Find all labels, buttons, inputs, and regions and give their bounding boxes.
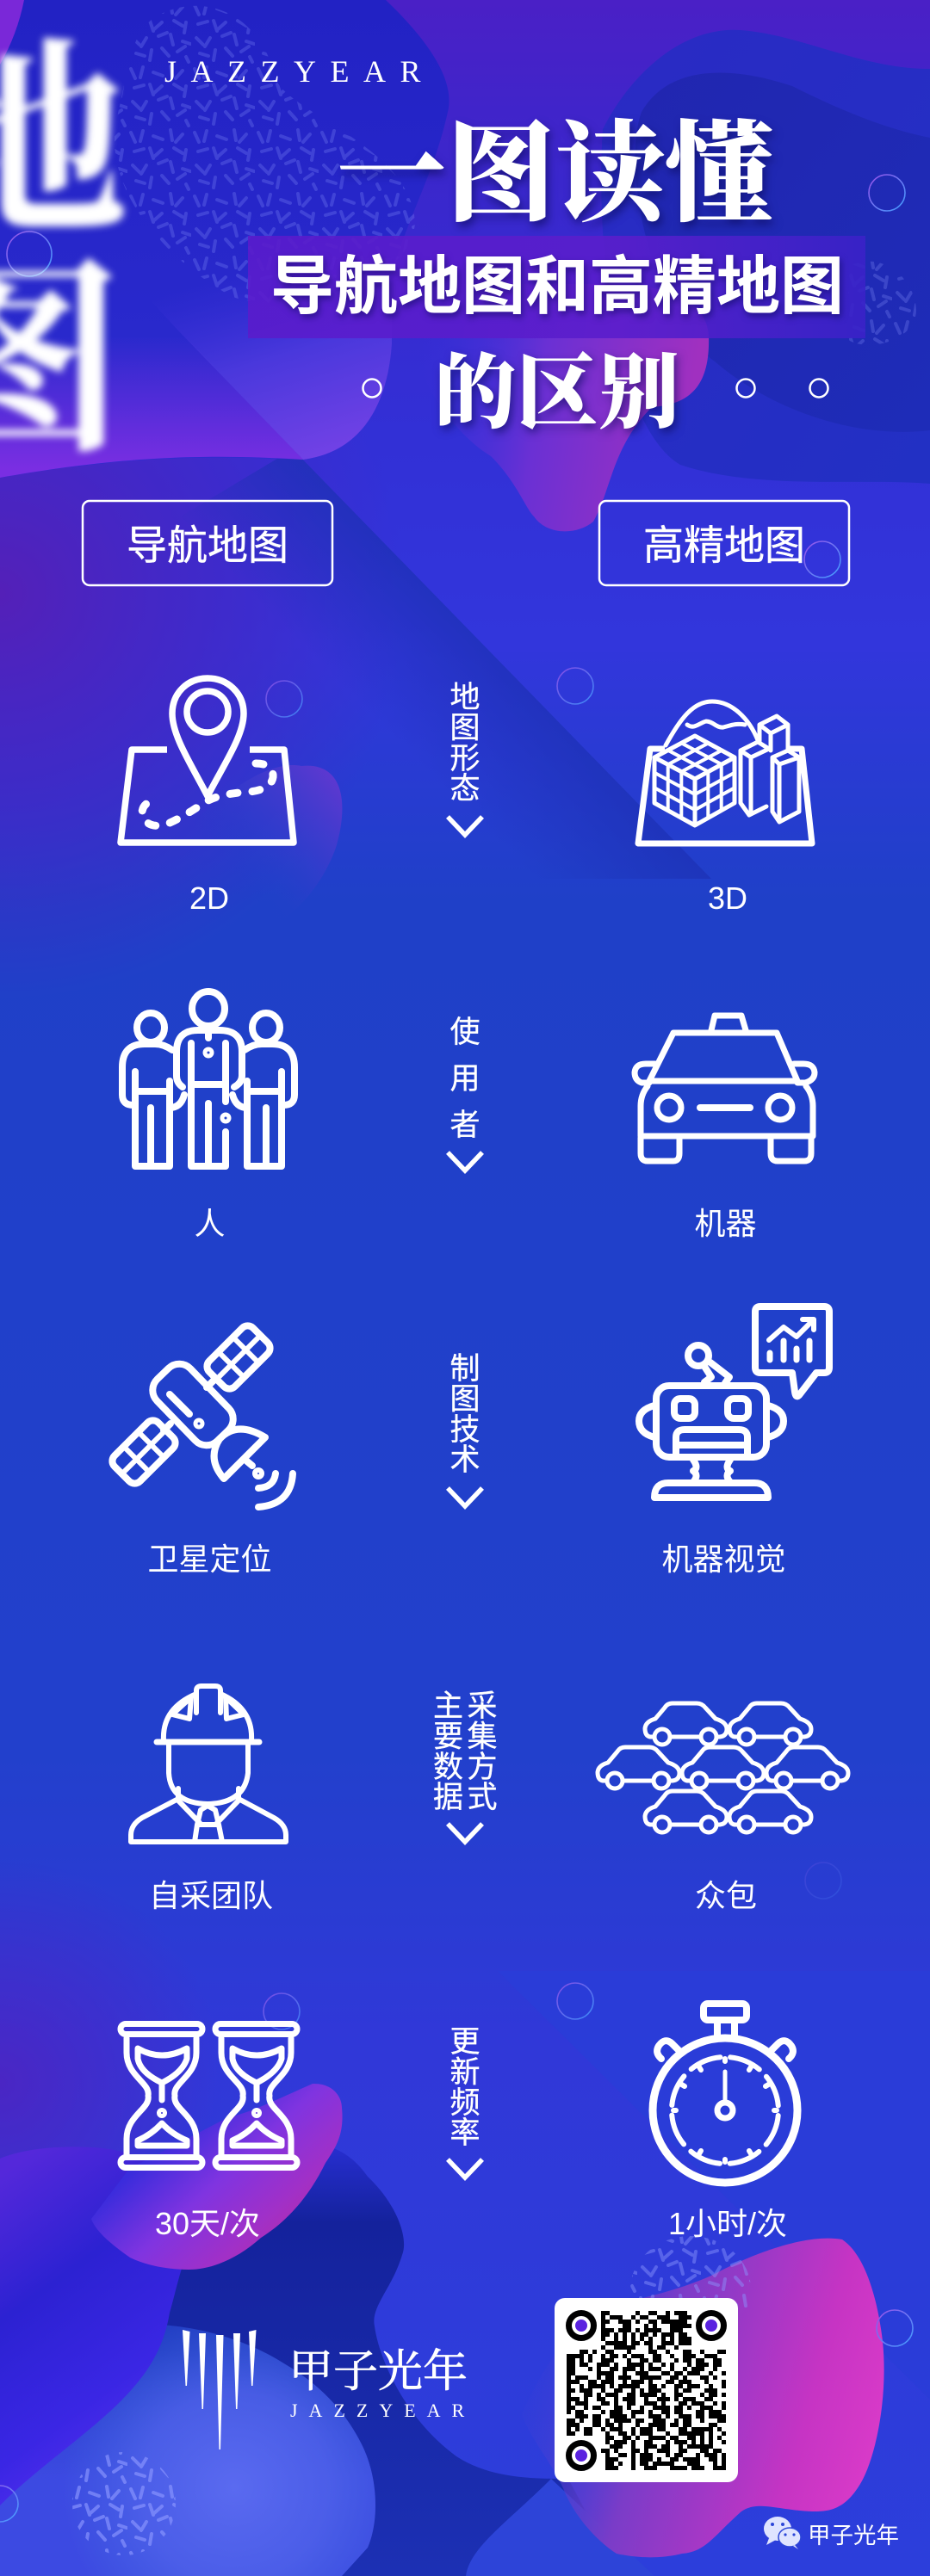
label: 机器视觉: 机器视觉 [661,1541,786,1577]
icon: people [122,991,294,1166]
vertical label: 制图技术: 图 [450,1382,480,1417]
title line 1: 一图读懂 [337,115,774,236]
arrow down 5 [448,2159,482,2178]
vertical label: 制图技术: 制 [450,1352,480,1386]
vertical label: 主要数据采集方式: 采 [467,1690,498,1723]
title highlight bar: 导航地图和高精地图 [270,250,844,322]
vertical label: 使用者: 者 [450,1109,480,1142]
vertical label: 主要数据采集方式 [433,1690,498,1814]
icon: 3D map [638,701,812,843]
button: 导航地图 [83,501,332,585]
icon: taxi [635,1016,815,1161]
vertical label: 主要数据采集方式: 数 [433,1751,463,1784]
label: 30天/次: 30天/次 [155,2206,260,2241]
vertical label: 使用者: 使 [450,1016,480,1049]
label: 自采团队: 自采团队 [149,1878,273,1913]
vertical label: 主要数据采集方式: 据 [433,1781,463,1814]
icon: map with pin [121,678,294,843]
vertical label: 地图形态: 态 [450,772,480,806]
vertical label: 主要数据采集方式: 方 [467,1751,498,1784]
button: 高精地图 [599,501,849,585]
icon: wechat [764,2517,801,2549]
arrow down 4 [448,1824,482,1842]
vertical label: 更新频率: 频 [450,2086,480,2120]
vertical label: 制图技术: 技 [450,1413,480,1447]
logo: 甲子光年 wordmark: JAZZYEAR [290,2400,475,2421]
arrow down 2 [448,1152,482,1171]
logo: brand mark spikes [183,2330,257,2449]
icon: two hourglasses [121,2024,297,2167]
vertical label: 更新频率: 新 [450,2055,480,2090]
label: 人: 人 [194,1206,226,1241]
icon: satellite [109,1323,293,1507]
small title dots [363,379,828,398]
icon: engineer with helmet [131,1686,286,1842]
label: 卫星定位: 卫星定位 [147,1541,272,1577]
arrow down 3 [448,1488,482,1506]
QR code [555,2298,738,2482]
label: 机器: 机器 [694,1206,757,1241]
vertical label: 更新频率: 率 [450,2116,480,2150]
button: 高精地图: 高精地图 [643,522,805,568]
vertical label: 地图形态: 图 [450,711,480,745]
title highlight bar [248,236,865,338]
icon: stopwatch [653,2004,797,2183]
vertical label: 更新频率: 更 [450,2025,480,2059]
title line 3: 的区别 [434,348,680,439]
vertical label: 地图形态: 形 [450,742,480,775]
label: 众包: 众包 [695,1878,757,1913]
vertical label: 制图技术: 术 [450,1443,480,1477]
brand wordmark top: JAZZYEAR [164,54,435,89]
vertical label: 使用者: 用 [450,1062,480,1096]
icon: many cars [598,1703,848,1832]
vertical label: 主要数据采集方式: 集 [467,1720,498,1754]
label: 3D: 3D [708,880,747,916]
vertical label: 主要数据采集方式: 要 [433,1720,463,1754]
label: 2D: 2D [189,880,229,916]
vertical label: 地图形态: 地 [450,681,480,714]
icon: robot with chart [639,1307,829,1498]
logo: 甲子光年 wordmark: 甲子光年 [288,2347,468,2397]
blurred background characters [0,28,128,479]
button: 导航地图: 导航地图 [127,522,288,568]
label: 1小时/次: 1小时/次 [668,2206,787,2241]
arrow down 1 [448,817,482,835]
vertical label: 主要数据采集方式: 主 [433,1690,463,1723]
vertical label: 主要数据采集方式: 式 [467,1781,498,1814]
watermark text: 甲子光年 [808,2523,899,2548]
logo: 甲子光年 wordmark [288,2347,475,2421]
